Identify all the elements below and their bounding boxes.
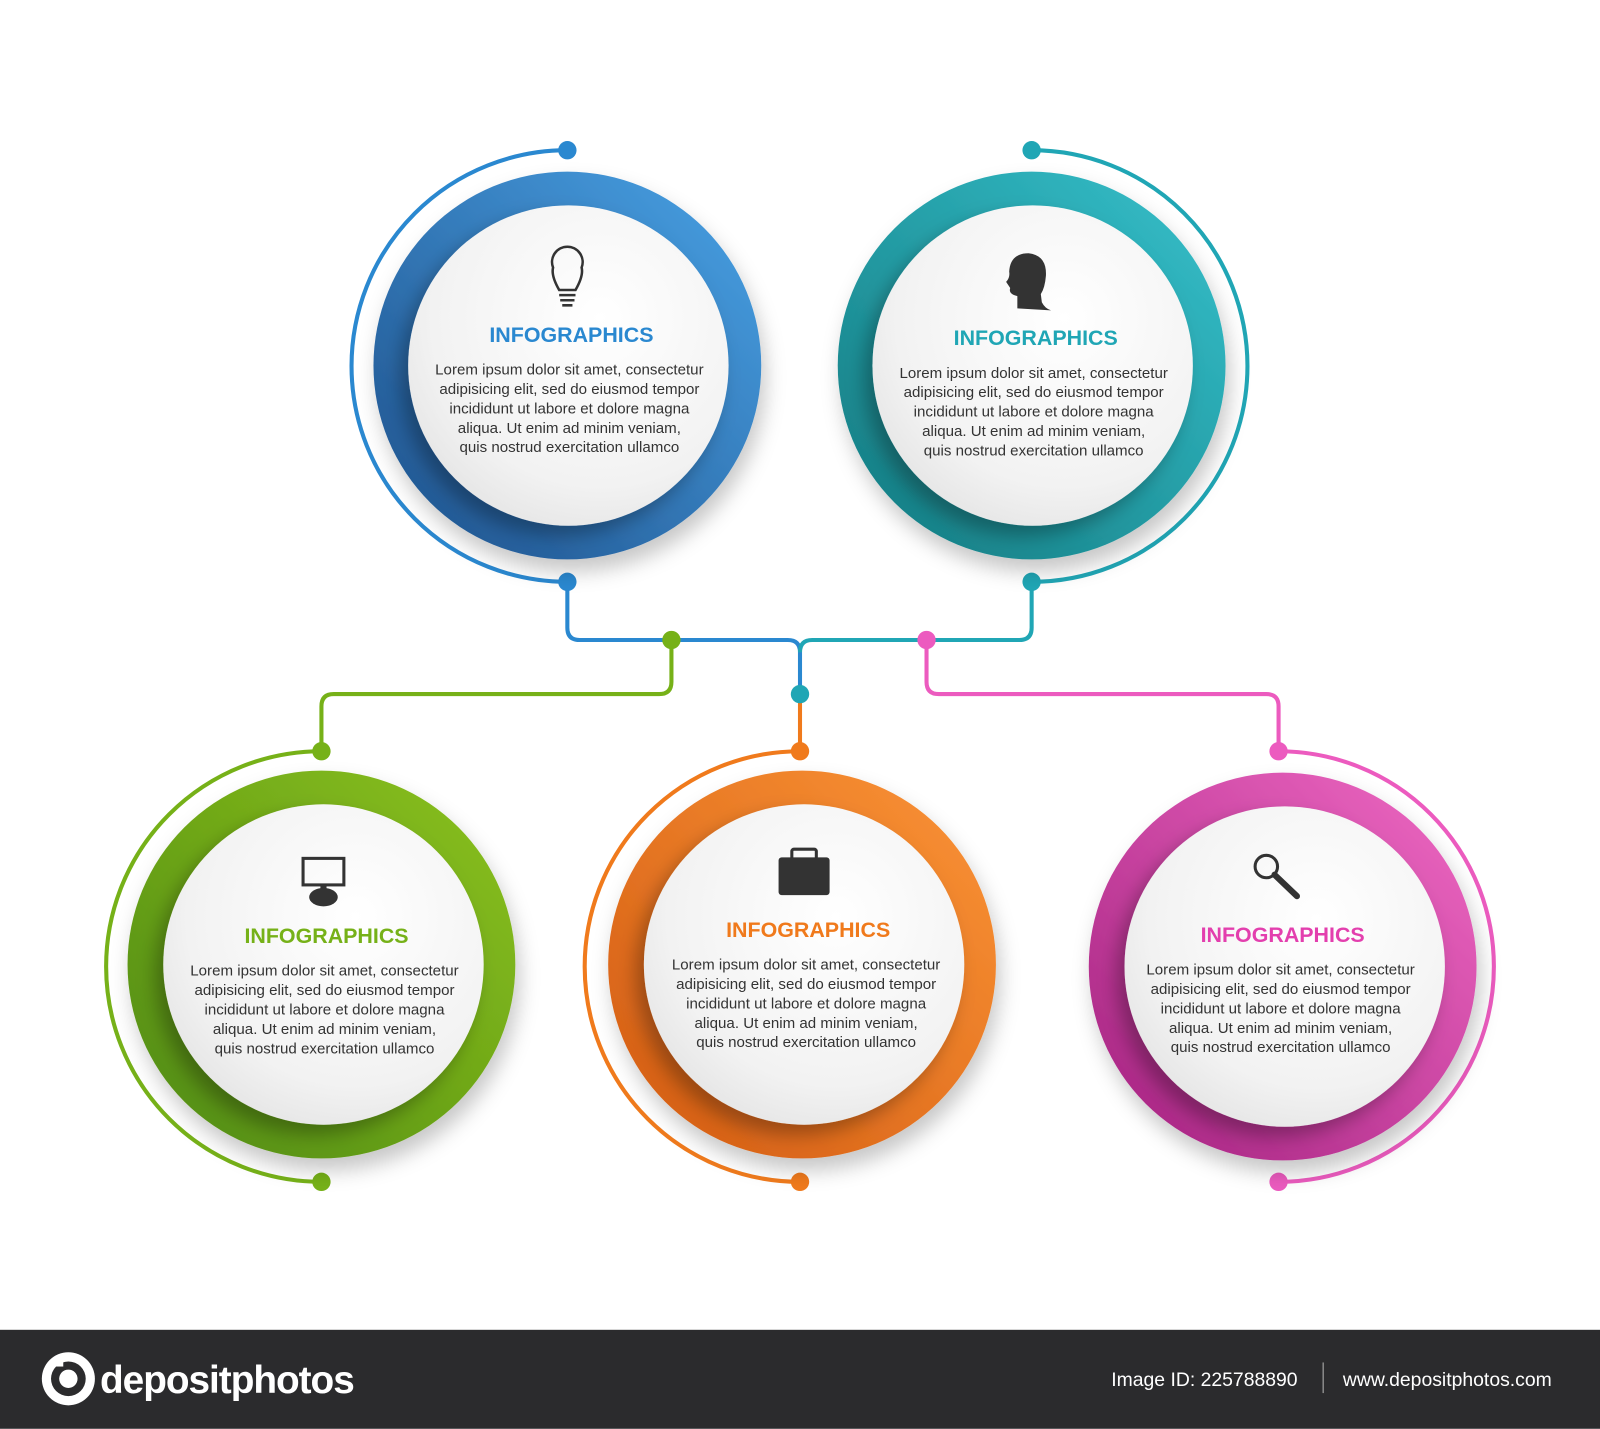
circle: green: Lorem ipsum dolor sit amet, consectetur [190,963,459,980]
circle: green: quis nostrud exercitation ullamco [215,1040,434,1057]
junction dots [662,631,936,649]
circle: orange: incididunt ut labore et dolore magna [686,995,927,1012]
connectors [321,582,1279,751]
circle: teal: INFOGRAPHICS [954,326,1118,350]
circle: pink: adipisicing elit, sed do eiusmod tempor [1151,981,1411,998]
circle: blue: INFOGRAPHICS [489,323,653,347]
circle: teal [838,141,1247,591]
footer logo [42,1352,354,1405]
circle: teal: incididunt ut labore et dolore magna [914,404,1154,421]
footer info: www.depositphotos.com [1342,1369,1552,1391]
circle: pink: aliqua. Ut enim ad minim veniam, [1169,1020,1392,1037]
circle: green: adipisicing elit, sed do eiusmod tempor [194,982,455,999]
circle: blue: aliqua. Ut enim ad minim veniam, [458,420,681,437]
icon: magnifier [1255,855,1297,896]
circle: pink [1089,742,1494,1191]
circle: orange: quis nostrud exercitation ullamco [696,1034,916,1051]
circle: blue [352,141,761,591]
footer logo: depositphotos [100,1359,354,1402]
footer bar [0,1330,1600,1429]
circle: orange: adipisicing elit, sed do eiusmod tempor [676,976,936,993]
circle: teal: Lorem ipsum dolor sit amet, consectetur [899,365,1168,382]
footer info: Image ID: 225788890 [1111,1369,1298,1391]
circle: blue: adipisicing elit, sed do eiusmod tempor [439,381,699,398]
circle: blue: incididunt ut labore et dolore magna [449,400,690,417]
circle: green [106,742,515,1191]
circle: teal: quis nostrud exercitation ullamco [924,442,1144,459]
circle: orange: INFOGRAPHICS [726,918,890,942]
circle: teal: aliqua. Ut enim ad minim veniam, [922,423,1145,440]
circle: teal: adipisicing elit, sed do eiusmod tempor [904,384,1164,401]
icon: monitor [303,858,344,906]
circle: orange: aliqua. Ut enim ad minim veniam, [695,1015,918,1032]
circle: pink: quis nostrud exercitation ullamco [1171,1039,1391,1056]
circle: pink: incididunt ut labore et dolore magna [1161,1000,1401,1017]
icon: light bulb [552,247,583,305]
circle: green: incididunt ut labore et dolore magna [204,1002,445,1019]
circle: pink: Lorem ipsum dolor sit amet, consectetur [1146,962,1415,979]
circle: pink: INFOGRAPHICS [1201,923,1365,947]
circle: orange [585,685,996,1191]
circle: green: INFOGRAPHICS [244,924,409,948]
circle: green: aliqua. Ut enim ad minim veniam, [213,1021,436,1038]
circle: blue: quis nostrud exercitation ullamco [459,439,679,456]
circle: orange: Lorem ipsum dolor sit amet, consectetur [672,957,940,974]
circle: blue: Lorem ipsum dolor sit amet, consectetur [435,362,704,379]
icon: head [1006,253,1051,310]
footer info [1111,1362,1552,1393]
icon: briefcase [779,849,830,895]
